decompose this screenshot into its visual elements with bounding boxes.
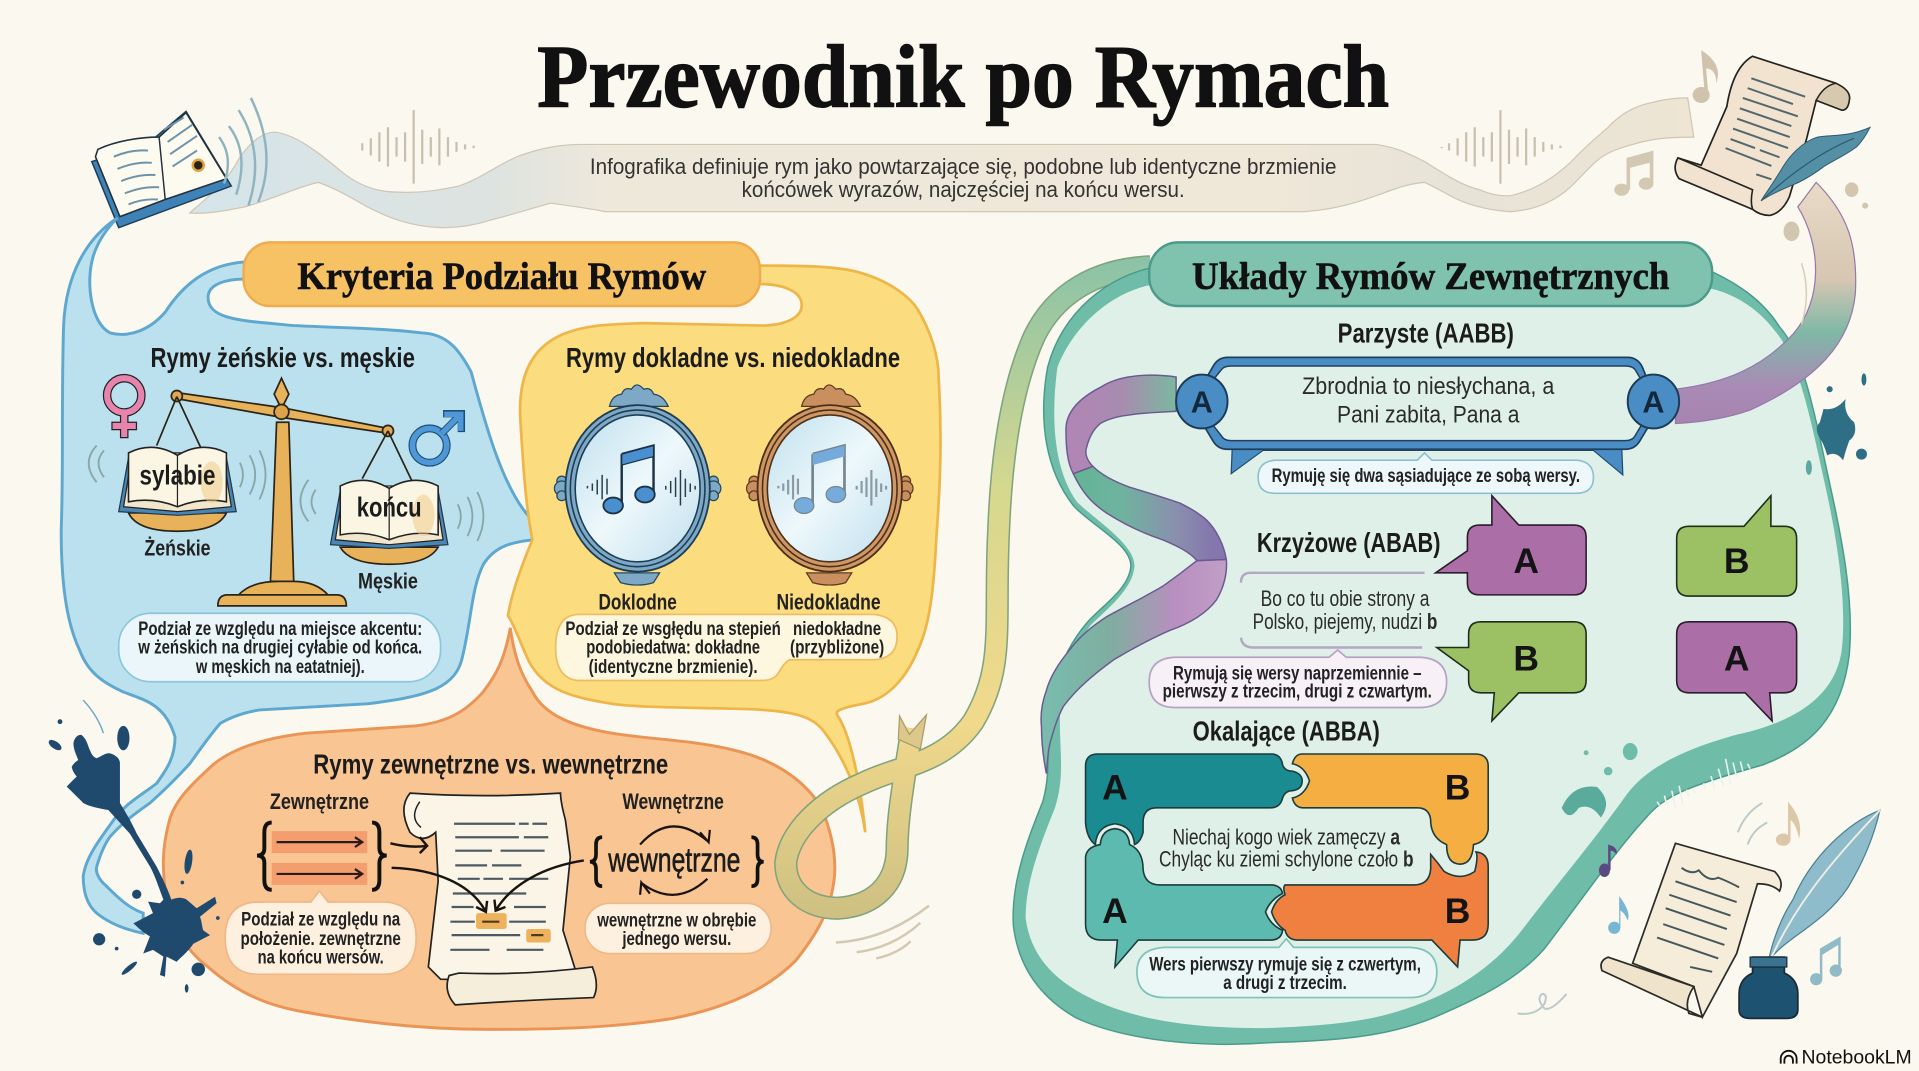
ribbon: purple green left: [1041, 375, 1227, 774]
piece B yellow top: B: [1445, 767, 1470, 807]
note: couplet: [1258, 453, 1593, 493]
enclosed rhyme verse: [1159, 825, 1414, 872]
icon: blue mirror: [554, 385, 721, 585]
ribbon: yellow loop: [786, 267, 1150, 958]
note: external: Podział ze względu na: [241, 909, 401, 930]
icon: open book with sound waves: [92, 98, 266, 228]
icon: female symbol: [107, 378, 141, 438]
note: crossed: [1149, 650, 1447, 707]
note: yellow panel: (identyczne brzmienie).: [589, 657, 758, 678]
enclosed rhyme verse: Chyląc ku ziemi schylone czoło b: [1159, 847, 1414, 872]
icon: ink bottle: [1739, 957, 1798, 1018]
note: couplet: Rymuję się dwa sąsiadujące ze sobą wersy.: [1272, 466, 1580, 487]
badge: Układy: Układy Rymów Zewnętrznych: [1192, 255, 1670, 298]
note: yellow panel: [556, 614, 897, 681]
piece A teal top: A: [1102, 767, 1128, 807]
panel: orange external vs internal: [163, 628, 835, 1029]
piece A teal top: [1086, 754, 1302, 845]
badge: Układy: [1149, 242, 1712, 306]
diagram: external rhymes: [257, 823, 387, 890]
heading: Rymy zewnętrzne vs. wewnętrzne: [313, 749, 668, 780]
note: crossed: pierwszy z trzecim, drugi z czwartym.: [1163, 682, 1432, 703]
icon: book końcu: końcu: [357, 492, 422, 523]
diagram: internal rhymes: wewnętrzne: [608, 841, 740, 879]
note: blue panel: Podział ze względu na miejsce akcentu:: [138, 619, 422, 640]
icon: male symbol: [412, 414, 461, 463]
icon: note top right: [1693, 50, 1718, 103]
diagram: couplet frame: Pani zabita, Pana a: [1337, 401, 1520, 428]
icon: double note: [1614, 151, 1653, 196]
piece A teal bottom: [1086, 829, 1283, 967]
icon: purple note: [1599, 845, 1617, 877]
icons: decorative notes bottom right: [1518, 802, 1842, 1014]
waveform left: [355, 110, 474, 184]
diagram: couplet frame: [1176, 357, 1679, 475]
logo: NotebookLM: NotebookLM: [1802, 1048, 1912, 1069]
crossed rhyme verse: [1241, 573, 1437, 647]
arrows into scroll: [390, 837, 584, 912]
note: enclosed: [1137, 939, 1437, 998]
bubble: A purple bottom: [1677, 622, 1797, 721]
label: Wewnętrzne: Wewnętrzne: [622, 789, 724, 814]
tan droplets: [1784, 182, 1868, 324]
note: yellow panel: podobiedatwa: dokładne: [586, 638, 760, 659]
icon: sound arcs: [89, 446, 483, 541]
heading: Okalające: Okalające (ABBA): [1193, 716, 1380, 747]
piece B orange bottom: B: [1445, 891, 1470, 931]
label: Niedokładne: Niedokladne: [777, 590, 881, 615]
icon: ink splat left: [67, 735, 217, 977]
note: yellow panel: (przybliżone): [790, 638, 884, 659]
ribbon: tan to purple right: [1675, 182, 1856, 424]
circle A right: A: [1642, 385, 1664, 419]
couplet text: Zbrodnia to niesłychana, a: [1302, 373, 1555, 400]
subtitle text: końcówek wyrazów, najczęściej na końcu wersu.: [742, 177, 1185, 202]
note: external: [225, 891, 416, 974]
icon: teal ink splash: [1806, 373, 1867, 475]
icon: book sylabie: [119, 447, 236, 515]
subtitle text: [590, 154, 1336, 202]
bubble: A purple bottom: A: [1724, 639, 1749, 679]
note: crossed: Rymują się wersy naprzemiennie –: [1173, 663, 1422, 684]
icon: scroll: [404, 793, 596, 1005]
bubble: B green top: [1677, 496, 1797, 596]
crossed rhyme verse: Bo co tu obie strony a: [1261, 586, 1430, 611]
bubble: B green top: B: [1724, 541, 1749, 581]
note: internal: [585, 903, 771, 953]
icon: bronze mirror: [747, 385, 913, 585]
bubble: A purple top: A: [1513, 541, 1539, 581]
circle A left: A: [1191, 385, 1213, 419]
piece B orange bottom: [1272, 852, 1488, 967]
note: blue panel: [119, 613, 441, 682]
bubble: B green bottom: [1437, 622, 1586, 721]
heading: Parzyste: Parzyste (AABB): [1338, 318, 1514, 349]
circle A left: [1176, 375, 1228, 428]
icon: balance scale: [129, 378, 438, 606]
waveform right: [1442, 110, 1560, 184]
teal splash and waveform: [1562, 743, 1750, 818]
heading: Krzyżowe: Krzyżowe (ABAB): [1257, 527, 1440, 558]
piece A teal bottom: A: [1102, 891, 1128, 931]
piece B yellow top: [1292, 754, 1488, 864]
label: Dokładne: Doklodne: [598, 590, 677, 615]
note: blue panel: w żeńskich na drugiej cyłabie od końca.: [138, 638, 422, 659]
label: Zewnętrzne: Zewnętrzne: [270, 789, 369, 814]
icon: scroll and quill bottom right: [1601, 810, 1880, 1017]
crossed rhyme verse: Polsko, piejemy, nudzi b: [1253, 609, 1437, 634]
icon: scroll with feather top right: [1675, 56, 1870, 215]
label: Męskie: Męskie: [358, 569, 418, 594]
subtitle text: Infografika definiuje rym jako powtarzające się, podobne lub identyczne brzmienie: [590, 154, 1336, 179]
badge: Kryteria: [244, 242, 760, 306]
circle A right: [1628, 375, 1679, 428]
bubble: A purple top: [1436, 496, 1586, 595]
enclosed rhyme verse: Niechaj kogo wiek zamęczy a: [1172, 825, 1401, 850]
puzzle: enclosed rhyme: [1086, 754, 1488, 967]
panel: blue feminine vs masculine: [61, 218, 532, 933]
heading: Rymy żeńskie vs. męskie: [151, 342, 415, 373]
panel: yellow exact vs inexact: [508, 266, 941, 832]
badge: Kryteria: Kryteria Podziału Rymów: [297, 255, 707, 298]
note: yellow panel: Podział ze wsgłędu na stepień: [565, 619, 781, 640]
panel: teal rhyme schemes: [1013, 267, 1850, 1044]
bubble: B green bottom: B: [1513, 639, 1539, 679]
title: Przewodnik po Rymach: [537, 27, 1389, 126]
note: enclosed: a drugi z trzecim.: [1223, 973, 1347, 994]
icon: book sylabie: sylabie: [140, 460, 215, 491]
note: external: położenie. zewnętrzne: [240, 929, 401, 950]
icon: book końcu: [330, 480, 448, 548]
subtitle ribbon: [190, 98, 1694, 228]
note: external: na końcu wersów.: [258, 947, 384, 968]
note: blue panel: w męskich na eatatniej).: [195, 657, 365, 678]
note: enclosed: Wers pierwszy rymuje się z czwertym,: [1149, 955, 1421, 976]
note: internal: jednego wersu.: [622, 929, 731, 950]
note: yellow panel: niedokładne: [793, 619, 881, 640]
heading: Rymy dokladne vs. niedokladne: [566, 342, 900, 373]
diagram: internal rhymes: [590, 826, 764, 895]
label: Żeńskie: Żeńskie: [144, 536, 211, 561]
note: internal: wewnętrzne w obrębie: [596, 911, 756, 932]
ink droplets left: [47, 700, 220, 993]
